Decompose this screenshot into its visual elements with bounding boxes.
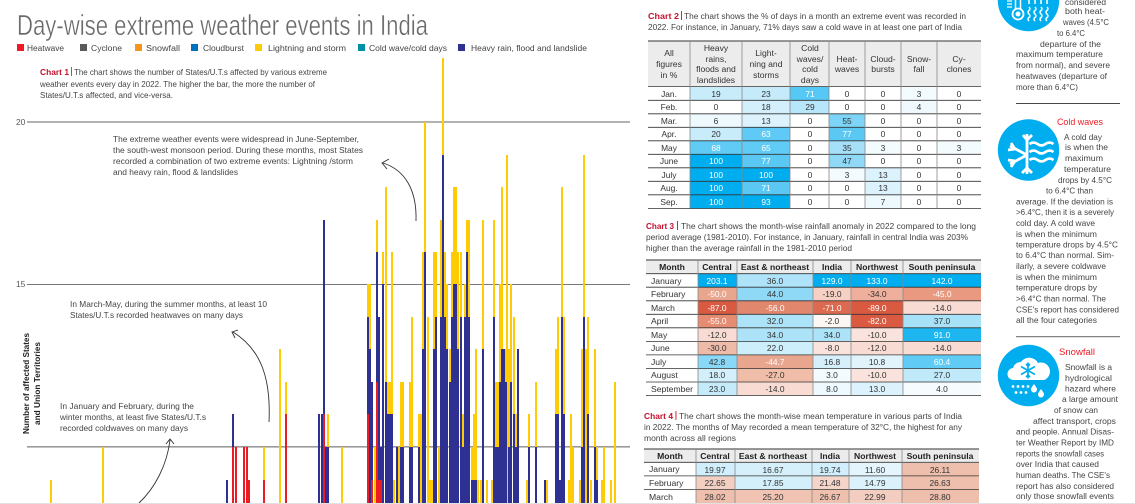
table 3 header: South peninsula	[909, 262, 976, 272]
table 4 header	[644, 449, 979, 462]
legend: Snowfall	[146, 43, 180, 53]
table 3 rows: 32.0	[767, 316, 783, 326]
annotation: monsoon	[113, 134, 363, 177]
table 2 rows: 23	[761, 89, 771, 99]
table 2 rows: June	[660, 156, 678, 166]
table 3 rows: 27.0	[934, 370, 950, 380]
table 3 rows: 22.0	[767, 343, 783, 353]
annotation: monsoon: the south-west monsoon period. During these months, most States	[113, 145, 363, 155]
table 3 shading	[698, 274, 981, 396]
table 2 rows: 0	[957, 102, 962, 112]
snowfall definition text: and people. Annual Disas-	[1016, 426, 1114, 436]
chart 1 description	[39, 67, 327, 100]
chart 4 description: in 2022. The months of May recorded a mean temperature of 32°C, the highest for any	[644, 422, 963, 432]
heatwave definition text: waves (4.5°C	[1062, 17, 1109, 27]
table 3 rows: -12.0	[707, 330, 727, 340]
table 2 header: Heavy	[704, 43, 729, 53]
legend: Heavy rain, flood and landslide	[471, 43, 587, 53]
arrow: summer	[232, 330, 269, 422]
table 2 rows: 13	[878, 183, 888, 193]
table 2 header: waves	[834, 64, 859, 74]
table 2 rows: July	[662, 170, 677, 180]
table 3 rows: -45.0	[932, 289, 952, 299]
cold waves definition text: to 6.4°C than normal. Sim-	[1016, 250, 1114, 260]
table 3 rows: January	[651, 276, 682, 286]
table 3 rows: 203.1	[707, 276, 728, 286]
table 2 rows: 0	[881, 129, 886, 139]
table 3 header: East & northeast	[741, 262, 809, 272]
table 4 rows: 16.67	[763, 465, 784, 475]
legend: Heatwave	[27, 43, 64, 53]
table 2 rows: 20	[711, 129, 721, 139]
table 2 rows: 18	[761, 102, 771, 112]
heatwave definition text: from normal), and severe	[1016, 60, 1110, 70]
y axis title	[21, 333, 42, 434]
table 2 header: rains,	[705, 54, 727, 64]
table 2 header: Light-	[755, 48, 777, 58]
table 4 rows: 28.02	[705, 492, 726, 502]
table 4 rows: January	[649, 464, 680, 474]
table 3 rows: 4.0	[936, 384, 948, 394]
table 2 rows: 0	[957, 156, 962, 166]
table 3 rows: 34.0	[824, 330, 840, 340]
chart 4 description: Chart 4	[644, 411, 673, 421]
chart 2 description	[648, 11, 966, 32]
table 4 rows: 19.97	[705, 465, 726, 475]
table 2 rows: 100	[709, 170, 723, 180]
snowfall definition text: of snow can	[1054, 405, 1098, 415]
table 2 rows: 68	[711, 143, 721, 153]
table 2 rows: Jan.	[661, 89, 677, 99]
cold waves definition text: to 6.4°C than	[1046, 186, 1093, 196]
table 4 rows: 17.85	[763, 478, 784, 488]
cold waves definition text: drops by 4.5°C	[1058, 175, 1112, 185]
y axis labels and grid lines	[16, 117, 630, 448]
table 2 rows: 55	[842, 116, 852, 126]
cold waves definition text: is when the	[1065, 142, 1108, 152]
y axis title: and Union Territories	[32, 342, 42, 425]
y axis title: Number of affected States	[21, 333, 31, 434]
chart 4 description: month across all regions	[644, 433, 736, 443]
cold waves definition text: ilarly, a severe coldwave	[1016, 261, 1106, 271]
table: chart 4	[644, 449, 979, 503]
table 2 rows: 4	[917, 102, 922, 112]
snowfall definition text: human deaths. The CSE's	[1016, 470, 1110, 480]
table 3 rows: February	[651, 289, 686, 299]
table 3 rows: 34.0	[767, 330, 783, 340]
table 2 rows: 0	[808, 116, 813, 126]
table 2 rows: 35	[842, 143, 852, 153]
chart 1 description: Chart 1	[40, 67, 69, 77]
table 4 rows: February	[649, 478, 684, 488]
table 2 rows: 0	[957, 89, 962, 99]
table 2 rows: Mar.	[661, 116, 677, 126]
table 3 rows: -82.0	[867, 316, 887, 326]
table 3 rows: -2.0	[825, 316, 840, 326]
table 3 rows: -34.0	[867, 289, 887, 299]
table 4 rows: 22.65	[705, 478, 726, 488]
table 4 header: Central	[700, 451, 730, 461]
table 3 rows: July	[651, 357, 667, 367]
annotation: summer: In March-May, during the summer months, at least 10	[70, 299, 267, 309]
table 3 rows	[651, 276, 953, 394]
table 4 rows: March	[649, 492, 673, 502]
table 4 shading	[696, 463, 979, 503]
table 3 rows: -19.0	[822, 289, 842, 299]
table 3 rows: -89.0	[867, 303, 887, 313]
table 2 header: clones	[947, 64, 971, 74]
snowfall definition text	[1016, 362, 1119, 501]
cold waves definition text: average. If the deviation is	[1016, 196, 1113, 206]
table 2 rows: 0	[845, 102, 850, 112]
table 4 rows: 21.48	[820, 478, 841, 488]
annotation: winter: winter months, at least five States/U.T.s	[59, 412, 206, 422]
table 2 rows: 0	[957, 197, 962, 207]
table 2 rows: 0	[808, 170, 813, 180]
table 4 rows: 19.74	[820, 465, 841, 475]
chart 3 description: Chart 3	[646, 221, 674, 231]
table 2 rows: 0	[845, 197, 850, 207]
table 3 rows: 16.8	[824, 357, 840, 367]
table 2 rows: 71	[761, 183, 771, 193]
table 4 header: Northwest	[854, 451, 896, 461]
table 2 rows: 100	[709, 156, 723, 166]
cold waves definition text: CSE's report has considered	[1016, 304, 1119, 314]
icon: thermometer and heat	[998, 0, 1059, 31]
table 2 rows: 93	[761, 197, 771, 207]
table 2 rows: 77	[842, 129, 852, 139]
table 2 header: waves/	[796, 54, 824, 64]
heatwave definition text: maximum temperature	[1016, 49, 1103, 59]
table 2 header: cold	[802, 64, 818, 74]
table 3 rows: 13.0	[869, 384, 885, 394]
table 2 rows: 77	[761, 156, 771, 166]
arrow: winter	[139, 439, 174, 503]
table 3 rows: -14.0	[932, 303, 952, 313]
cold waves definition text	[1016, 132, 1119, 325]
chart 1 description: States/U.T.s affected, and vice-versa.	[40, 90, 173, 100]
table 2 rows: 0	[881, 89, 886, 99]
table 4 rows: 25.20	[763, 492, 784, 502]
cold waves definition text: temperature drops by	[1016, 282, 1098, 292]
chart 3 description: period average (1981-2010). For instance, in January, rainfall in central India was 203%	[646, 232, 968, 242]
cold waves definition text: A cold day	[1064, 132, 1103, 142]
heatwave bars	[232, 382, 382, 504]
table 3 rows: August	[651, 370, 678, 380]
table 3 rows: -50.0	[707, 289, 727, 299]
snowfall definition text: affect transport, crops	[1033, 416, 1116, 426]
table 2 rows: 0	[957, 183, 962, 193]
icon: snow cloud	[998, 345, 1059, 406]
table 2 rows: 0	[808, 183, 813, 193]
cold waves definition text: is when the minimum	[1016, 272, 1097, 282]
table 3 rows: -10.0	[867, 370, 887, 380]
table 2 header: in %	[661, 70, 678, 80]
table 2 rows: 0	[917, 116, 922, 126]
table 2 rows: 65	[761, 143, 771, 153]
table 2 rows: 0	[917, 170, 922, 180]
table 3 rows: -56.0	[765, 303, 785, 313]
table 4 rows: 28.80	[930, 492, 951, 502]
table 2 header: figures	[656, 59, 682, 69]
table 2 rows: 7	[881, 197, 886, 207]
table 4 rows	[649, 464, 951, 502]
table 3 rows: 91.0	[934, 330, 950, 340]
table 4 rows: 26.67	[820, 492, 841, 502]
annotation: summer: States/U.T.s recorded heatwaves on many days	[70, 310, 243, 320]
table 2 header: Cold	[801, 43, 819, 53]
cold waves heading: Cold waves	[1057, 117, 1103, 127]
table 2 header: Snow-	[907, 54, 931, 64]
bar chart: number of affected states per day	[16, 58, 630, 504]
table 3 header: Northwest	[856, 262, 898, 272]
table 2 rows: 0	[808, 143, 813, 153]
cold waves definition text: temperature drops by 4.5°C	[1016, 240, 1118, 250]
table 3 rows: -8.0	[825, 343, 840, 353]
snowfall definition text: reports the snowfall cases	[1016, 448, 1104, 458]
table 2 header	[648, 41, 981, 86]
table 2 header: Heat-	[836, 54, 858, 64]
table 2 rows: 0	[808, 129, 813, 139]
table 2 header: All	[664, 48, 674, 58]
heatwave definition text: heatwaves (departure of	[1016, 71, 1108, 81]
snowfall heading: Snowfall	[1059, 347, 1095, 357]
table 2 rows: 0	[808, 197, 813, 207]
table 2 header: Cy-	[952, 54, 966, 64]
chart 4 description: The chart shows the month-wise mean temperature in various parts of India	[679, 411, 962, 421]
cold waves definition text: maximum	[1065, 153, 1103, 163]
heatwave definition text: departure of the	[1040, 39, 1101, 49]
heavy rain, flood and landslide bars	[226, 155, 598, 504]
snowfall definition text: report has also considered	[1016, 481, 1114, 491]
cold waves definition text: is when the minimum	[1016, 229, 1097, 239]
snowfall definition text: over India that caused	[1016, 459, 1099, 469]
annotation: monsoon: recorded a combination of two extreme events: Lightning /storm	[113, 156, 353, 166]
cold waves definition text: all the four categories	[1016, 315, 1097, 325]
table 3 rows: 142.0	[932, 276, 953, 286]
table 3 header	[646, 260, 981, 274]
table 3 rows: -14.0	[765, 384, 785, 394]
table 2 rows: 19	[711, 89, 721, 99]
icon: snowflake and cold waves	[998, 119, 1059, 181]
table 2 rows: 71	[805, 89, 815, 99]
table 3 rows: 23.0	[709, 384, 725, 394]
chart 3 description: higher than the average rainfall in the 1981-2010 period	[646, 243, 852, 253]
table 2 rows: 0	[957, 116, 962, 126]
table: chart 3	[646, 260, 981, 396]
table 2 rows: 0	[917, 197, 922, 207]
table 3 rows: -87.0	[707, 303, 727, 313]
legend: Cold wave/cold days	[369, 43, 447, 53]
table 2 header: floods and	[696, 64, 736, 74]
table 3 rows: 18.0	[709, 370, 725, 380]
table 2 rows: Feb.	[661, 102, 677, 112]
table 2 header: fall	[914, 64, 925, 74]
table 3 rows: -71.0	[822, 303, 842, 313]
table 2 rows: Aug.	[660, 183, 678, 193]
y axis labels and grid lines: 15	[16, 279, 26, 289]
table 2 rows: 47	[842, 156, 852, 166]
table 3 rows: 129.0	[822, 276, 843, 286]
table 2 header: ning and	[750, 59, 783, 69]
title: Day-wise extreme weather events in India	[17, 10, 429, 42]
annotation: winter: recorded coldwaves on many days	[60, 423, 188, 433]
table 2 rows: 63	[761, 129, 771, 139]
table: chart 2	[648, 41, 981, 208]
table 3 rows: -12.0	[867, 343, 887, 353]
chart 2 description: The chart shows the % of days in a month an extreme event was recorded in	[684, 11, 966, 21]
arrow: monsoon	[382, 159, 416, 221]
table 2 shading	[690, 87, 981, 208]
table 4 header: East & northeast	[739, 451, 807, 461]
table 2 rows	[660, 89, 962, 207]
chart 4 description	[644, 411, 963, 443]
table 3 rows: -14.0	[932, 343, 952, 353]
table 2 rows: 0	[845, 183, 850, 193]
lightning and storm bars	[50, 58, 616, 504]
table 3 header: Month	[659, 262, 685, 272]
table 3 rows: -10.0	[867, 330, 887, 340]
table 4 rows: 26.11	[930, 465, 951, 475]
cold waves definition text: >6.4°C than normal. The	[1016, 294, 1106, 304]
legend	[17, 43, 587, 53]
table 2 rows: 13	[878, 170, 888, 180]
snowfall definition text: ter Weather Report by IMD	[1016, 438, 1114, 448]
table 2 rows: 0	[881, 156, 886, 166]
chart 3 description	[646, 221, 976, 253]
legend: Lightning and storm	[268, 43, 346, 53]
chart 2 description: 2022. For instance, in January, 71% days saw a cold wave in at least one part of India	[648, 22, 962, 32]
legend: Cloudburst	[203, 43, 245, 53]
table 2 rows: 0	[917, 156, 922, 166]
table 2 rows: 29	[805, 102, 815, 112]
table 3 rows: 133.0	[867, 276, 888, 286]
table 3 rows: September	[651, 384, 693, 394]
annotation: winter: In January and February, during the	[60, 401, 194, 411]
table 3 rows: -30.0	[707, 343, 727, 353]
table 2 header: bursts	[871, 64, 895, 74]
table 2 rows: 0	[957, 129, 962, 139]
table 4 rows: 11.60	[865, 465, 886, 475]
table 3 header: India	[822, 262, 842, 272]
annotation: summer	[70, 299, 267, 320]
table 2 rows: 6	[714, 116, 719, 126]
table 3 rows: March	[651, 303, 675, 313]
table 2 rows: 0	[845, 89, 850, 99]
y axis labels and grid lines: 20	[16, 117, 26, 127]
table 3 rows: -55.0	[707, 316, 727, 326]
cold waves definition text: temperature	[1064, 164, 1111, 174]
snowfall definition text: a large amount	[1062, 394, 1119, 404]
table 2 rows: 0	[881, 116, 886, 126]
heatwave definition text	[1016, 0, 1110, 92]
heatwave definition text: both heat-	[1065, 6, 1105, 16]
chart 3 description: The chart shows the month-wise rainfall anomaly in 2022 compared to the long	[681, 221, 976, 231]
chart 2 description: Chart 2	[648, 11, 679, 21]
table 3 rows: 44.0	[767, 289, 783, 299]
table 2 rows: 0	[881, 102, 886, 112]
table 4 header: Month	[657, 451, 683, 461]
cold waves definition text: >6.4°C, then it is a severely	[1016, 207, 1115, 217]
table 2 rows: 0	[917, 143, 922, 153]
table 3 rows: 60.4	[934, 357, 950, 367]
table 2 rows: 3	[881, 143, 886, 153]
table 3 rows: 10.8	[869, 357, 885, 367]
snowfall definition text: Snowfall is a	[1065, 362, 1112, 372]
table 3 rows: -44.7	[765, 357, 785, 367]
snowfall definition text: hydrological	[1065, 373, 1112, 383]
annotation: winter	[59, 401, 206, 433]
table 3 rows: 3.0	[826, 370, 838, 380]
table 3 rows: 37.0	[934, 316, 950, 326]
table 2 rows: 0	[714, 102, 719, 112]
heatwave definition text: to 6.4°C	[1057, 28, 1085, 38]
table 2 rows: 0	[917, 183, 922, 193]
table 3 rows: 8.0	[826, 384, 838, 394]
annotation: monsoon: and heavy rain, flood & landslides	[113, 167, 238, 177]
table 2 rows: 3	[845, 170, 850, 180]
table 2 header: storms	[753, 70, 779, 80]
table 2 header: landslides	[697, 75, 735, 85]
annotation: monsoon: The extreme weather events were widespread in June-September,	[113, 134, 359, 144]
table 4 rows: 14.79	[865, 478, 886, 488]
table 2 rows: 0	[808, 156, 813, 166]
table 4 header: India	[820, 451, 840, 461]
cold waves definition text: cold day. A cold wave	[1016, 218, 1095, 228]
table 2 rows: 0	[957, 170, 962, 180]
legend: Cyclone	[91, 43, 122, 53]
table 3 rows: April	[651, 316, 668, 326]
snowfall definition text: hazard where	[1065, 384, 1116, 394]
table 2 rows: Sep.	[660, 197, 678, 207]
snowfall definition text: only those snowfall events	[1016, 491, 1114, 501]
chart 1 description: The chart shows the number of States/U.T.s affected by various extreme	[74, 67, 327, 77]
table 3 rows: June	[651, 343, 670, 353]
table 4 header: South peninsula	[907, 451, 974, 461]
heatwave definition text: more than 6.4°C)	[1016, 82, 1078, 92]
table 2 rows: 3	[917, 89, 922, 99]
table 3 rows: -27.0	[765, 370, 785, 380]
table 2 rows: 13	[761, 116, 771, 126]
table 2 rows: 100	[759, 170, 773, 180]
table 2 rows: 0	[917, 129, 922, 139]
table 2 rows: 100	[709, 183, 723, 193]
table 3 rows: 42.8	[709, 357, 725, 367]
table 3 rows: May	[651, 330, 668, 340]
table 4 rows: 26.63	[930, 478, 951, 488]
table 2 rows: 100	[709, 197, 723, 207]
table 3 header: Central	[702, 262, 732, 272]
table 2 rows: May	[661, 143, 678, 153]
table 3 rows: 36.0	[767, 276, 783, 286]
table 2 header: days	[801, 75, 819, 85]
table 2 rows: Apr.	[662, 129, 676, 139]
table 2 rows: 3	[957, 143, 962, 153]
table 4 rows: 22.99	[865, 492, 886, 502]
chart 1 description: weather events every day in 2022. The higher the bar, the more the number of	[39, 79, 316, 89]
table 2 header: Cloud-	[870, 54, 896, 64]
